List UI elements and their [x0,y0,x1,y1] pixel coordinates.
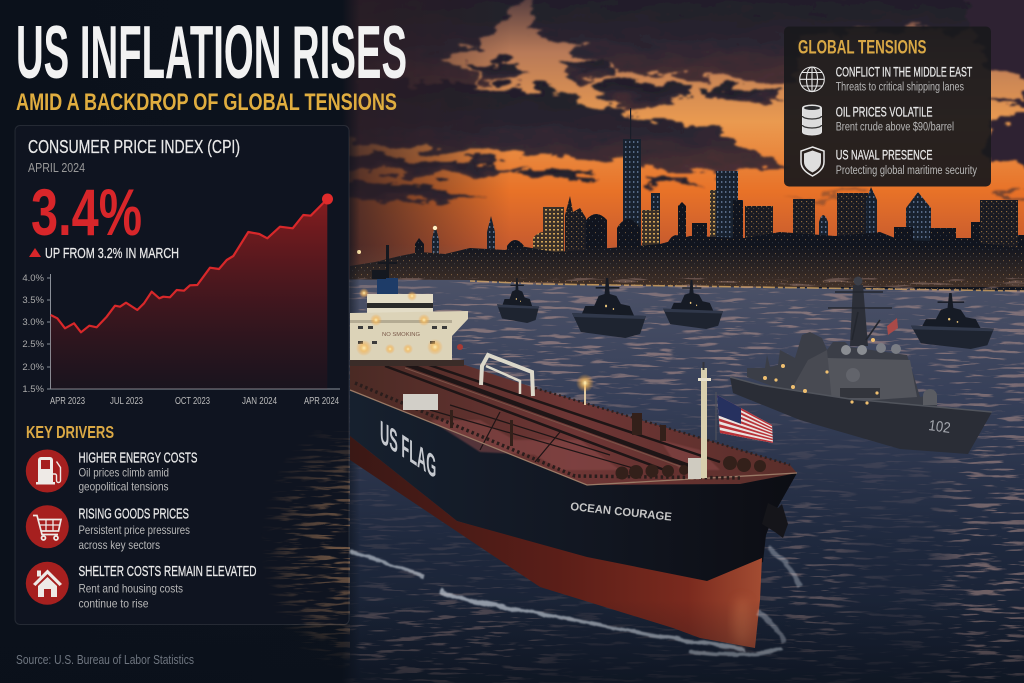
left sky shade [340,0,510,290]
CPI line chart: 3.5% [22,295,45,306]
tanker superstructure [350,245,468,366]
left dark overlay [0,0,360,683]
CPI line chart: OCT 2023 [175,396,210,407]
background: sunset sky [0,0,1024,290]
warship: large destroyer 102: 102 [927,417,952,437]
tanker hull [350,385,797,583]
subtitle: AMID A BACKDROP OF GLOBAL TENSIONS [16,89,397,116]
shoreline lights [470,281,1024,291]
CPI line chart [22,194,340,407]
oil tanker [350,245,797,648]
CPI line chart: 4.0% [22,273,45,284]
driver: higher energy costs: HIGHER ENERGY COSTS [78,451,198,467]
driver: shelter costs: SHELTER COSTS REMAIN ELEVATED [78,564,256,580]
warship: far right [911,293,994,349]
source note: Source: U.S. Bureau of Labor Statistics [16,653,194,667]
deck light post [576,374,594,405]
item: US naval presence [801,147,977,177]
CPI line chart: 2.5% [22,339,45,350]
CPI big number: 3.4% [31,175,142,249]
bow wake foam [350,548,800,654]
CPI line chart: 2.0% [22,362,45,373]
driver: shelter costs [26,562,256,611]
driver: rising goods prices: Persistent price pressures [78,523,190,537]
tanker deck [350,365,797,485]
item: conflict in the Middle East: Threats to critical shipping lanes [836,82,964,94]
sunset clouds [330,0,1024,202]
bow anchor [762,503,788,538]
icon: shopping cart [33,516,61,540]
warship: distant left [497,278,539,323]
driver: shelter costs: continue to rise [78,597,149,611]
CPI line chart: APR 2024 [304,396,339,407]
oil tanker: US FLAG [380,413,436,486]
icon: fuel pump [36,457,60,484]
CPI change note: UP FROM 3.2% IN MARCH [45,246,179,262]
warship: distant centre [572,278,646,338]
deck cabin [403,394,438,410]
deck piping [350,362,797,485]
deck crane [481,355,533,396]
hull lettering: OCEAN COURAGE: OCEAN COURAGE [570,501,673,524]
CPI line chart: 3.0% [22,317,45,328]
sea ripples [340,278,1024,683]
tanker superstructure: NO SMOKING [382,332,420,338]
icon: house [33,570,62,597]
driver: higher energy costs [26,450,197,494]
bow mast [688,362,711,479]
lower dark vignette [0,600,1024,683]
CPI date: APRIL 2024 [28,161,85,175]
CPI line chart: APR 2023 [50,396,85,407]
CPI line chart: JAN 2024 [242,396,277,407]
item: US naval presence: Protecting global maritime security [836,165,977,177]
driver: rising goods prices [26,505,190,552]
background: sea water [0,278,1024,683]
item: oil prices volatile [802,105,954,135]
panel: CPI and key drivers [15,126,349,624]
CPI line chart: 1.5% [22,384,45,395]
deck reflections [430,420,720,470]
title: US INFLATION RISES [16,10,407,94]
driver: rising goods prices: across key sectors [78,538,160,552]
bow highlight [733,598,751,646]
CPI change note [29,246,179,262]
American flag [716,392,773,443]
warship: distant right [663,280,723,329]
driver: higher energy costs: geopolitical tensions [78,480,168,494]
icon: oil barrel [802,105,822,135]
global tensions heading: GLOBAL TENSIONS [798,37,926,58]
key drivers heading: KEY DRIVERS [26,422,114,442]
item: conflict in the Middle East [800,65,972,94]
panel: global tensions [784,26,991,186]
deck machinery [450,410,766,480]
city skyline [350,108,1024,290]
icon: shield [801,147,824,176]
warm ripples showing through panel edge [266,432,350,659]
warship: large destroyer 102 [730,276,992,454]
driver: higher energy costs: Oil prices climb amid [78,466,169,480]
icon: globe [800,67,824,92]
CPI line chart: JUL 2023 [110,396,143,407]
tanker red boot-topping [350,436,762,648]
item: US naval presence: US NAVAL PRESENCE [836,147,932,162]
driver: shelter costs: Rent and housing costs [78,582,183,596]
CPI heading: CONSUMER PRICE INDEX (CPI) [28,137,240,157]
item: oil prices volatile: OIL PRICES VOLATILE [836,105,932,120]
item: oil prices volatile: Brent crude above $90/barrel [836,122,954,134]
driver: rising goods prices: RISING GOODS PRICES [78,506,189,522]
